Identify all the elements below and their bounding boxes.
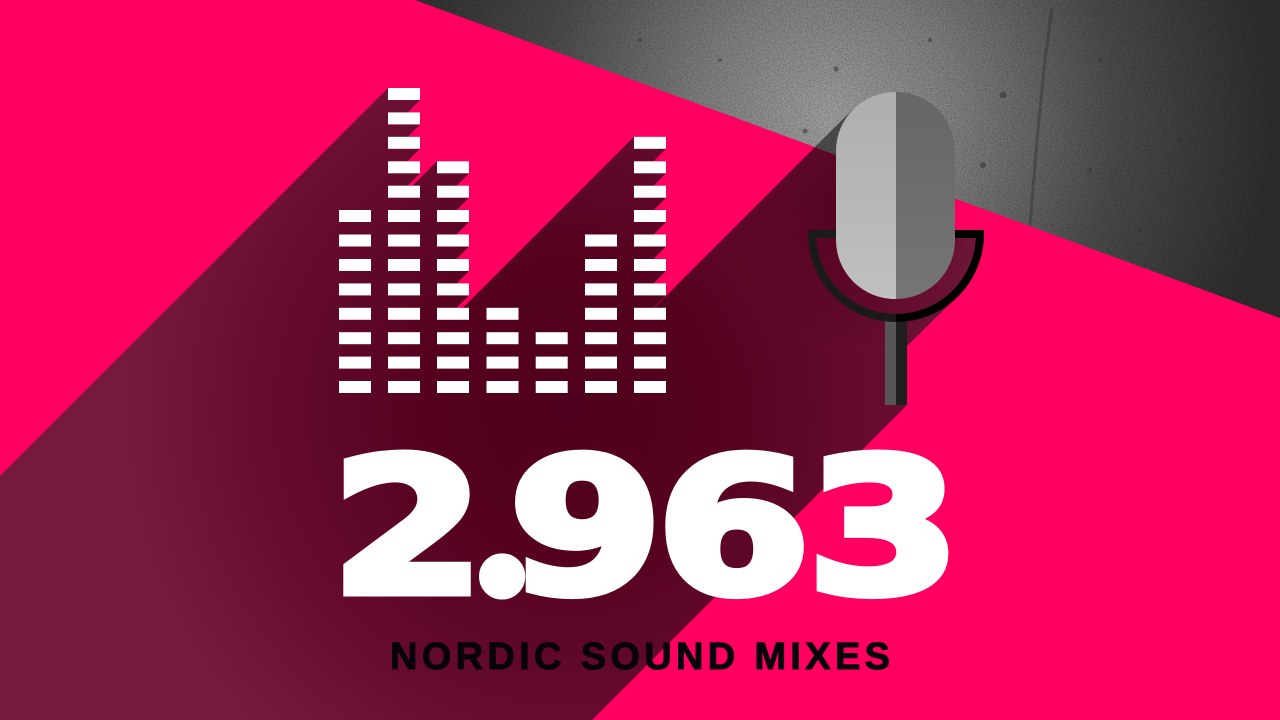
big number [331, 342, 961, 658]
column 7 [634, 137, 666, 393]
column 2 [388, 88, 420, 393]
column 4 [486, 308, 518, 393]
big number: . [466, 342, 538, 658]
subtitle: NORDIC SOUND MIXES [390, 636, 890, 678]
column 6 [585, 234, 617, 393]
big number: 963 [509, 421, 961, 637]
long shadow: microphone and equalizer [0, 88, 983, 720]
column 1 [339, 210, 371, 393]
microphone stem [885, 320, 907, 405]
column 5 [536, 332, 568, 393]
microphone capsule [836, 92, 955, 299]
big number: 2 [331, 421, 485, 637]
microphone cradle [812, 234, 980, 318]
background: concrete wall [415, 0, 1280, 318]
equalizer bars [339, 88, 666, 393]
column 3 [437, 161, 469, 393]
icon: microphone [812, 92, 980, 405]
